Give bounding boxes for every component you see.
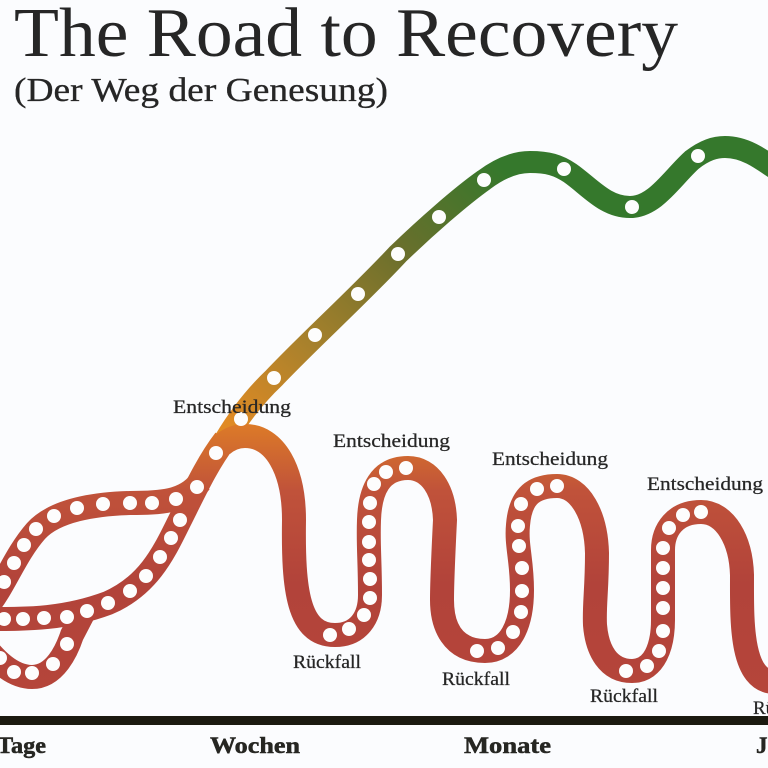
relapse labels bbox=[293, 652, 768, 719]
decision labels: Entscheidung bbox=[333, 431, 451, 452]
decision labels bbox=[173, 397, 764, 495]
relapse labels: Rückfall bbox=[293, 652, 361, 673]
road: relapse serpentine bbox=[222, 436, 768, 682]
relapse labels: Rückfall bbox=[442, 669, 510, 690]
decision labels: Entscheidung bbox=[647, 474, 764, 495]
timeline axis bbox=[0, 716, 768, 725]
timeline labels: Wochen bbox=[210, 733, 300, 758]
timeline labels bbox=[0, 733, 768, 758]
decision labels: Entscheidung bbox=[173, 397, 292, 418]
relapse labels: Rückfall bbox=[590, 686, 658, 707]
subtitle: (Der Weg der Genesung) bbox=[14, 72, 388, 109]
road stops: white dots bbox=[0, 149, 708, 680]
road: loops at the start bbox=[0, 440, 225, 677]
road: recovery path rising to green bbox=[225, 147, 768, 440]
timeline labels: Monate bbox=[464, 733, 551, 758]
decision labels: Entscheidung bbox=[492, 449, 609, 470]
